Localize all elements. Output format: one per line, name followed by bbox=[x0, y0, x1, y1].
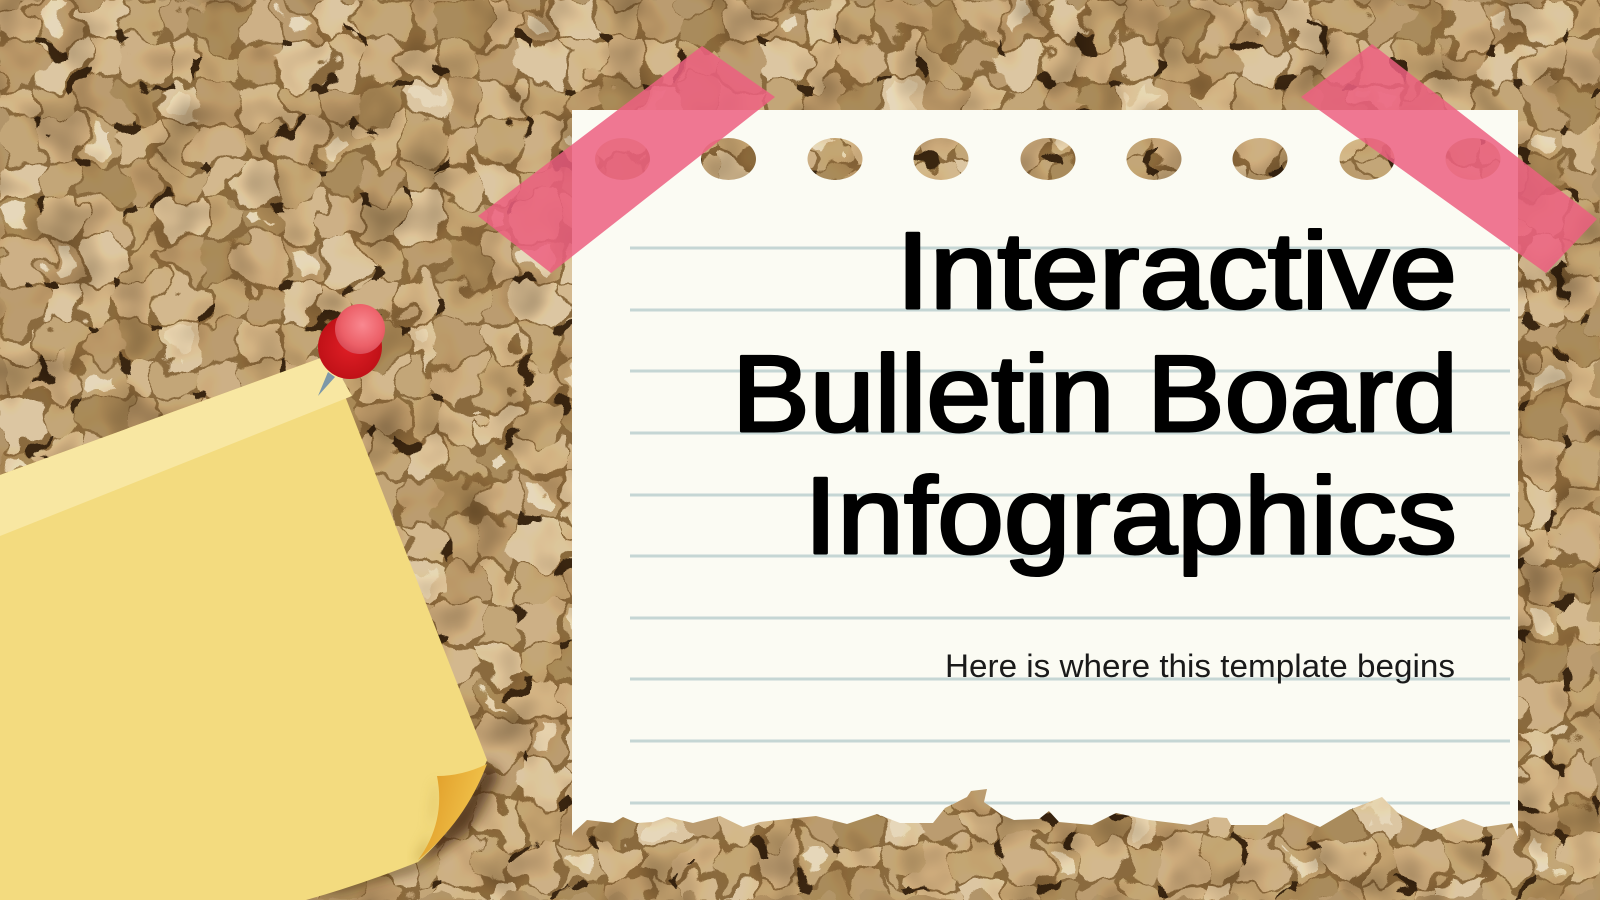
icon: red push pin bbox=[318, 304, 385, 396]
note drop shadow at curl bbox=[306, 762, 500, 890]
curl shadow on note bbox=[414, 778, 437, 862]
washi tape: top right bbox=[1301, 44, 1597, 273]
title: Bulletin Board bbox=[732, 333, 1458, 455]
pin head bbox=[335, 304, 385, 354]
pin needle bbox=[318, 372, 335, 396]
sticky note bbox=[0, 355, 500, 900]
note body bbox=[0, 355, 487, 900]
title: Interactive bbox=[896, 210, 1457, 332]
title: Infographics bbox=[804, 455, 1457, 577]
panel: torn notebook paper bbox=[572, 110, 1518, 837]
paper sheet with punched holes bbox=[572, 110, 1518, 837]
title bbox=[732, 210, 1458, 577]
note highlight band bbox=[0, 355, 352, 536]
icon: curled corner bbox=[418, 764, 487, 860]
pin base bbox=[318, 315, 382, 379]
washi tape: top left bbox=[478, 46, 775, 273]
subtitle: Here is where this template begins bbox=[945, 648, 1455, 684]
